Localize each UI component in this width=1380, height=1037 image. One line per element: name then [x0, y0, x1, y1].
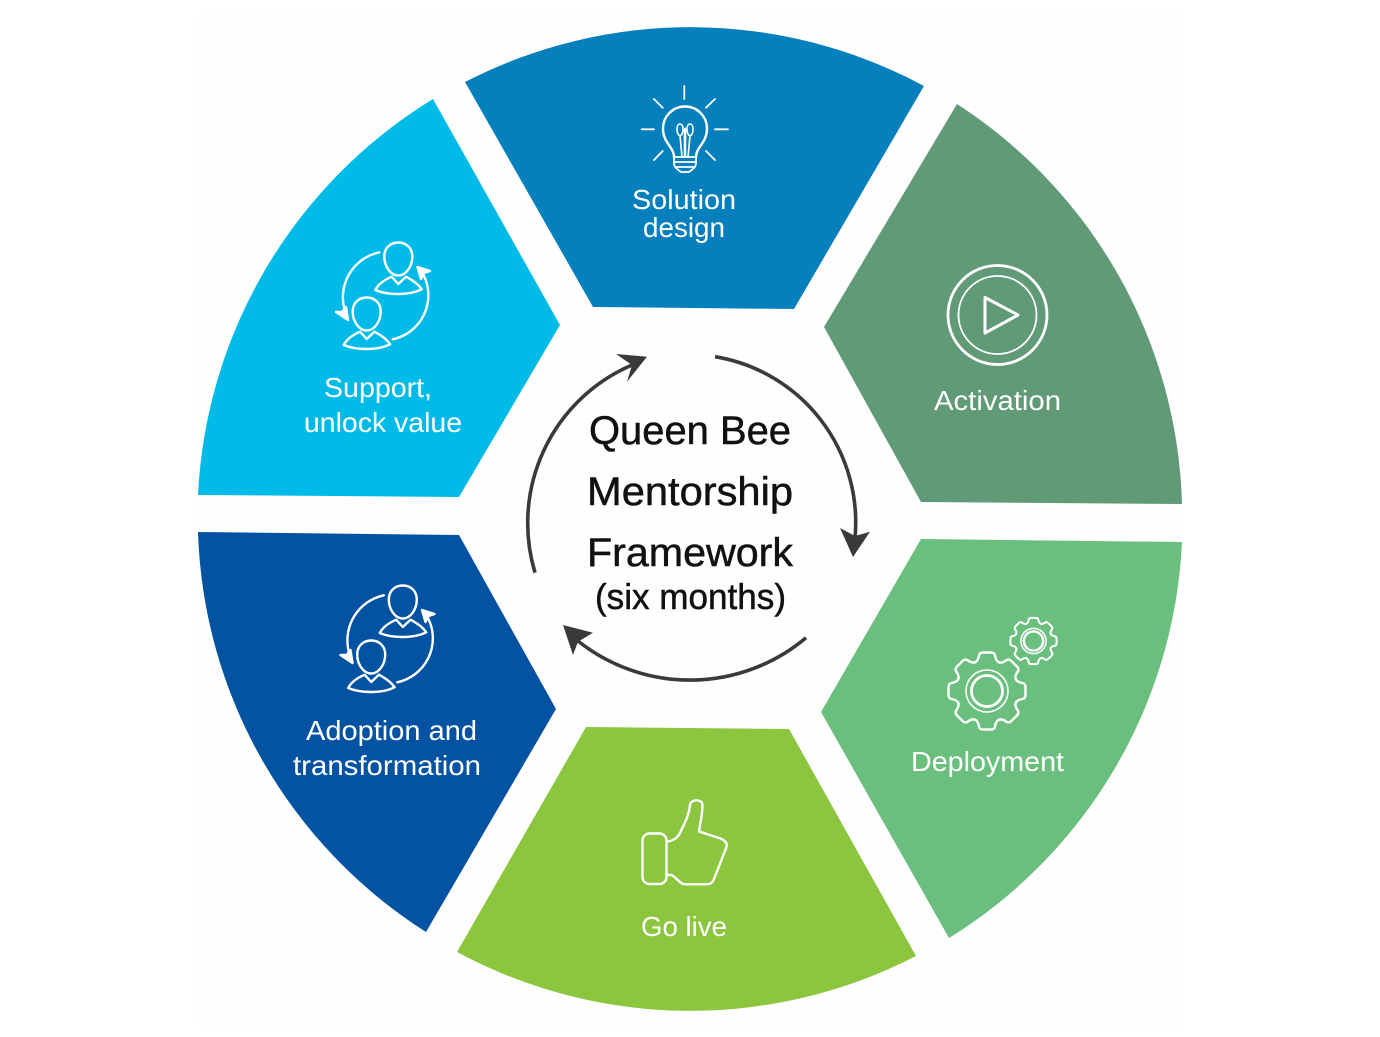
label: solution design: design [643, 212, 725, 243]
label: activation: Activation [934, 385, 1061, 416]
label: support, unlock value: Support, [324, 372, 432, 403]
icon: thumbs up [642, 800, 727, 884]
icon: gears [948, 618, 1057, 730]
panel: support, unlock value [198, 99, 560, 497]
label: adoption and transformation [293, 715, 481, 781]
icon: people exchange [340, 586, 434, 692]
panel: activation [824, 104, 1182, 504]
center title: (six months) [595, 576, 786, 617]
center title: Queen Bee [589, 409, 791, 453]
icon: play button [948, 266, 1047, 364]
panel: go live [457, 727, 916, 1011]
arrow: top right [715, 357, 870, 557]
label: deployment: Deployment [911, 746, 1064, 777]
label: adoption and transformation: Adoption and [306, 715, 477, 746]
label: support, unlock value [304, 372, 462, 438]
center cycle arrows [528, 354, 870, 680]
label: solution design [632, 184, 736, 243]
arrow: left [528, 354, 647, 573]
label: adoption and transformation: transformation [293, 750, 481, 781]
arrow: bottom [563, 625, 806, 680]
center title [587, 409, 794, 617]
panel: adoption and transformation [198, 532, 556, 932]
icon: people exchange [336, 242, 430, 349]
icon: light bulb [642, 86, 728, 172]
label: solution design: Solution [632, 184, 736, 215]
panel: solution design [465, 27, 924, 309]
label: go live: Go live [641, 911, 727, 942]
label: support, unlock value: unlock value [304, 407, 462, 438]
panel: deployment [821, 539, 1182, 938]
center title: Mentorship [587, 470, 793, 514]
center title: Framework [587, 531, 794, 575]
